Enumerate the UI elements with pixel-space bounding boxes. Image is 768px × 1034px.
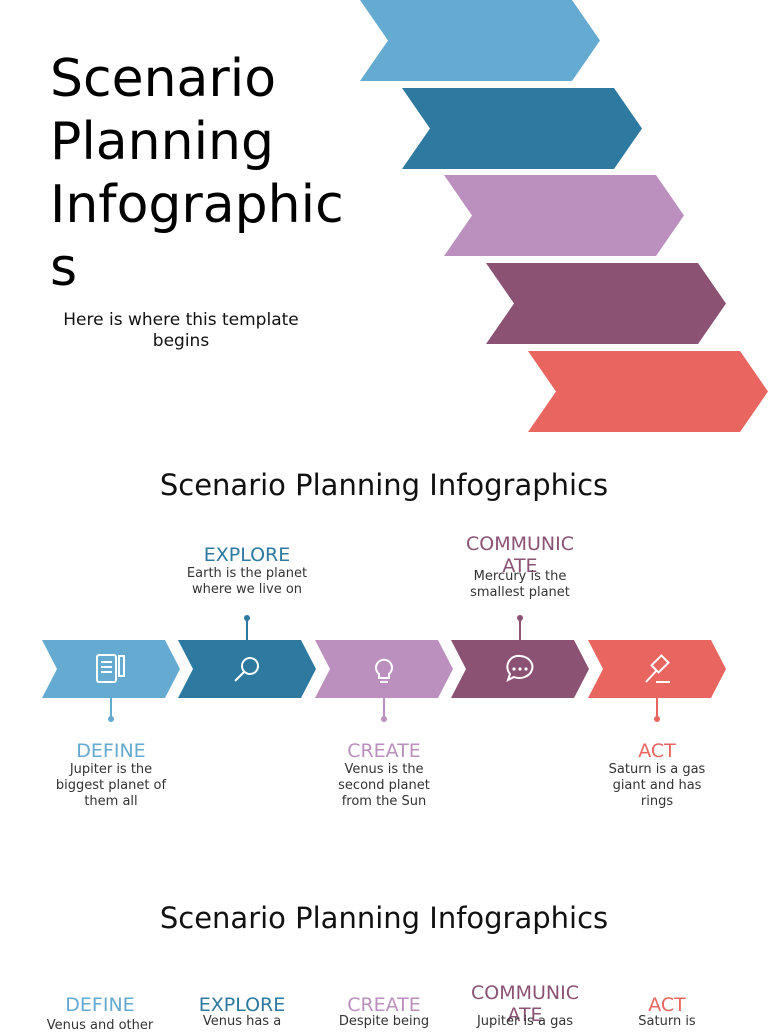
subtitle: Here is where this template begins <box>63 310 299 351</box>
text: Venus and other <box>47 1018 153 1033</box>
section heading 1: Scenario Planning Infographics <box>160 468 608 502</box>
bottom row labels: Saturn is <box>638 1014 696 1029</box>
bottom row labels <box>46 982 696 1033</box>
bottom row labels: Jupiter is a gas <box>477 1014 573 1029</box>
step: act: Saturn is a gas giant and has rings <box>609 762 705 809</box>
bottom row labels: ATE <box>507 1004 543 1026</box>
bottom row labels: Despite being <box>339 1014 429 1029</box>
step: define: Jupiter is the biggest planet of them all <box>56 762 166 809</box>
step: create <box>338 740 430 809</box>
section heading 2: Scenario Planning Infographics <box>160 901 608 935</box>
step: create: CREATE <box>347 740 421 762</box>
step: communicate: ATE <box>502 555 538 577</box>
bottom row labels: EXPLORE <box>199 994 285 1016</box>
step: communicate: Mercury is the smallest planet <box>470 569 570 600</box>
step: act: ACT <box>638 740 676 762</box>
bottom row labels: COMMUNIC <box>471 982 579 1004</box>
title <box>50 49 344 298</box>
title: Scenario <box>50 49 276 109</box>
bottom row labels: Venus has a <box>203 1014 281 1029</box>
stacked chevrons <box>360 0 768 432</box>
step: define <box>56 740 166 809</box>
step: explore: Earth is the planet where we live on <box>187 566 307 597</box>
step: create: Venus is the second planet from the Sun <box>338 762 430 809</box>
step: define: DEFINE <box>76 740 146 762</box>
bottom row labels: CREATE <box>347 994 421 1016</box>
step: act <box>609 740 705 809</box>
title: Planning <box>50 112 274 172</box>
title: s <box>50 238 77 298</box>
bottom row labels: ACT <box>648 994 686 1016</box>
process chevrons <box>42 615 726 722</box>
step: explore <box>187 544 307 597</box>
bottom row labels: DEFINE <box>65 994 135 1016</box>
step: explore: EXPLORE <box>204 544 290 566</box>
step: communicate <box>466 533 574 600</box>
title: Infographic <box>50 175 344 235</box>
step: communicate: COMMUNIC <box>466 533 574 555</box>
